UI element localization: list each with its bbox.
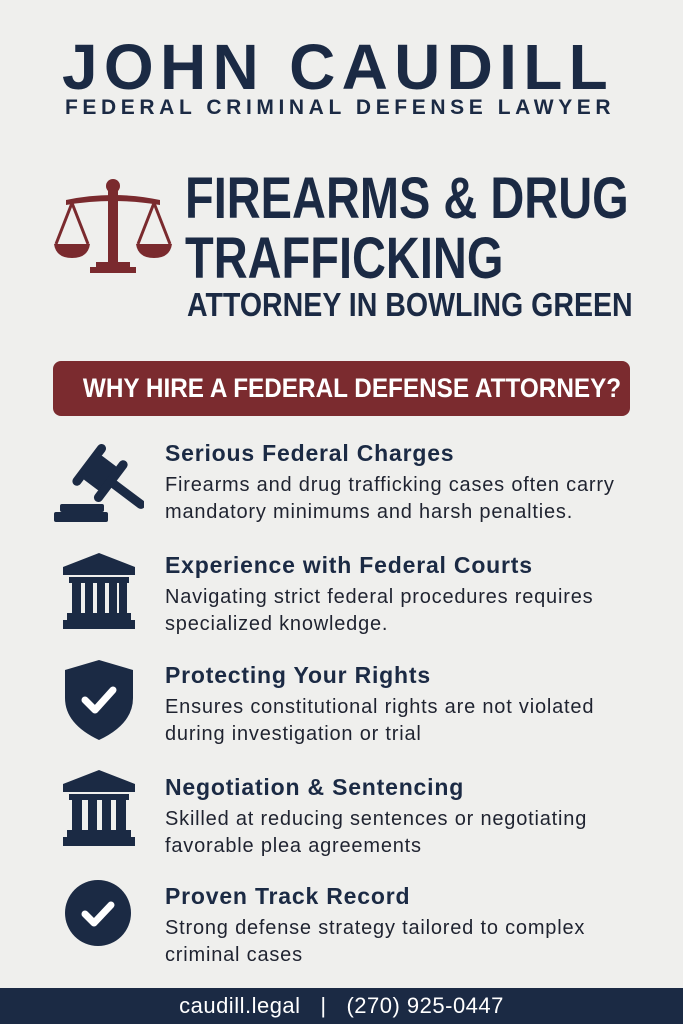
item 1: Firearms and drug trafficking cases often carry <box>165 474 615 496</box>
item 5: criminal cases <box>165 944 303 966</box>
item 3 <box>165 662 594 745</box>
item 2 <box>165 552 593 635</box>
item 1: mandatory minimums and harsh penalties. <box>165 501 573 523</box>
item 4 <box>165 774 587 857</box>
item 3: Ensures constitutional rights are not violated <box>165 696 594 718</box>
icon: circle check <box>65 880 131 946</box>
title: JOHN CAUDILL <box>62 31 614 103</box>
item 2: specialized knowledge. <box>165 613 388 635</box>
item 4: Negotiation & Sentencing <box>165 774 464 800</box>
icon: scales of justice <box>54 179 172 273</box>
item 5 <box>165 883 585 966</box>
subtitle: FEDERAL CRIMINAL DEFENSE LAWYER <box>65 96 615 119</box>
item 4: favorable plea agreements <box>165 835 422 857</box>
icon: gavel <box>54 444 144 522</box>
heading: TRAFFICKING <box>185 226 503 291</box>
item 1 <box>165 440 615 523</box>
footer <box>0 988 683 1024</box>
heading <box>185 166 633 323</box>
item 1: Serious Federal Charges <box>165 440 454 466</box>
banner: WHY HIRE A FEDERAL DEFENSE ATTORNEY? <box>83 373 621 403</box>
heading: ATTORNEY IN BOWLING GREEN <box>187 286 633 323</box>
icon: courthouse 2 <box>63 770 135 846</box>
icon: shield check <box>65 660 133 740</box>
item 2: Navigating strict federal procedures requires <box>165 586 593 608</box>
item 5: Strong defense strategy tailored to complex <box>165 917 585 939</box>
item 3: during investigation or trial <box>165 723 422 745</box>
heading: FIREARMS & DRUG <box>185 166 629 231</box>
item 4: Skilled at reducing sentences or negotiating <box>165 808 587 830</box>
icon: courthouse <box>63 553 135 629</box>
footer: caudill.legal | (270) 925-0447 <box>179 993 504 1018</box>
item 5: Proven Track Record <box>165 883 410 909</box>
item 3: Protecting Your Rights <box>165 662 431 688</box>
banner <box>53 361 630 416</box>
item 2: Experience with Federal Courts <box>165 552 533 578</box>
